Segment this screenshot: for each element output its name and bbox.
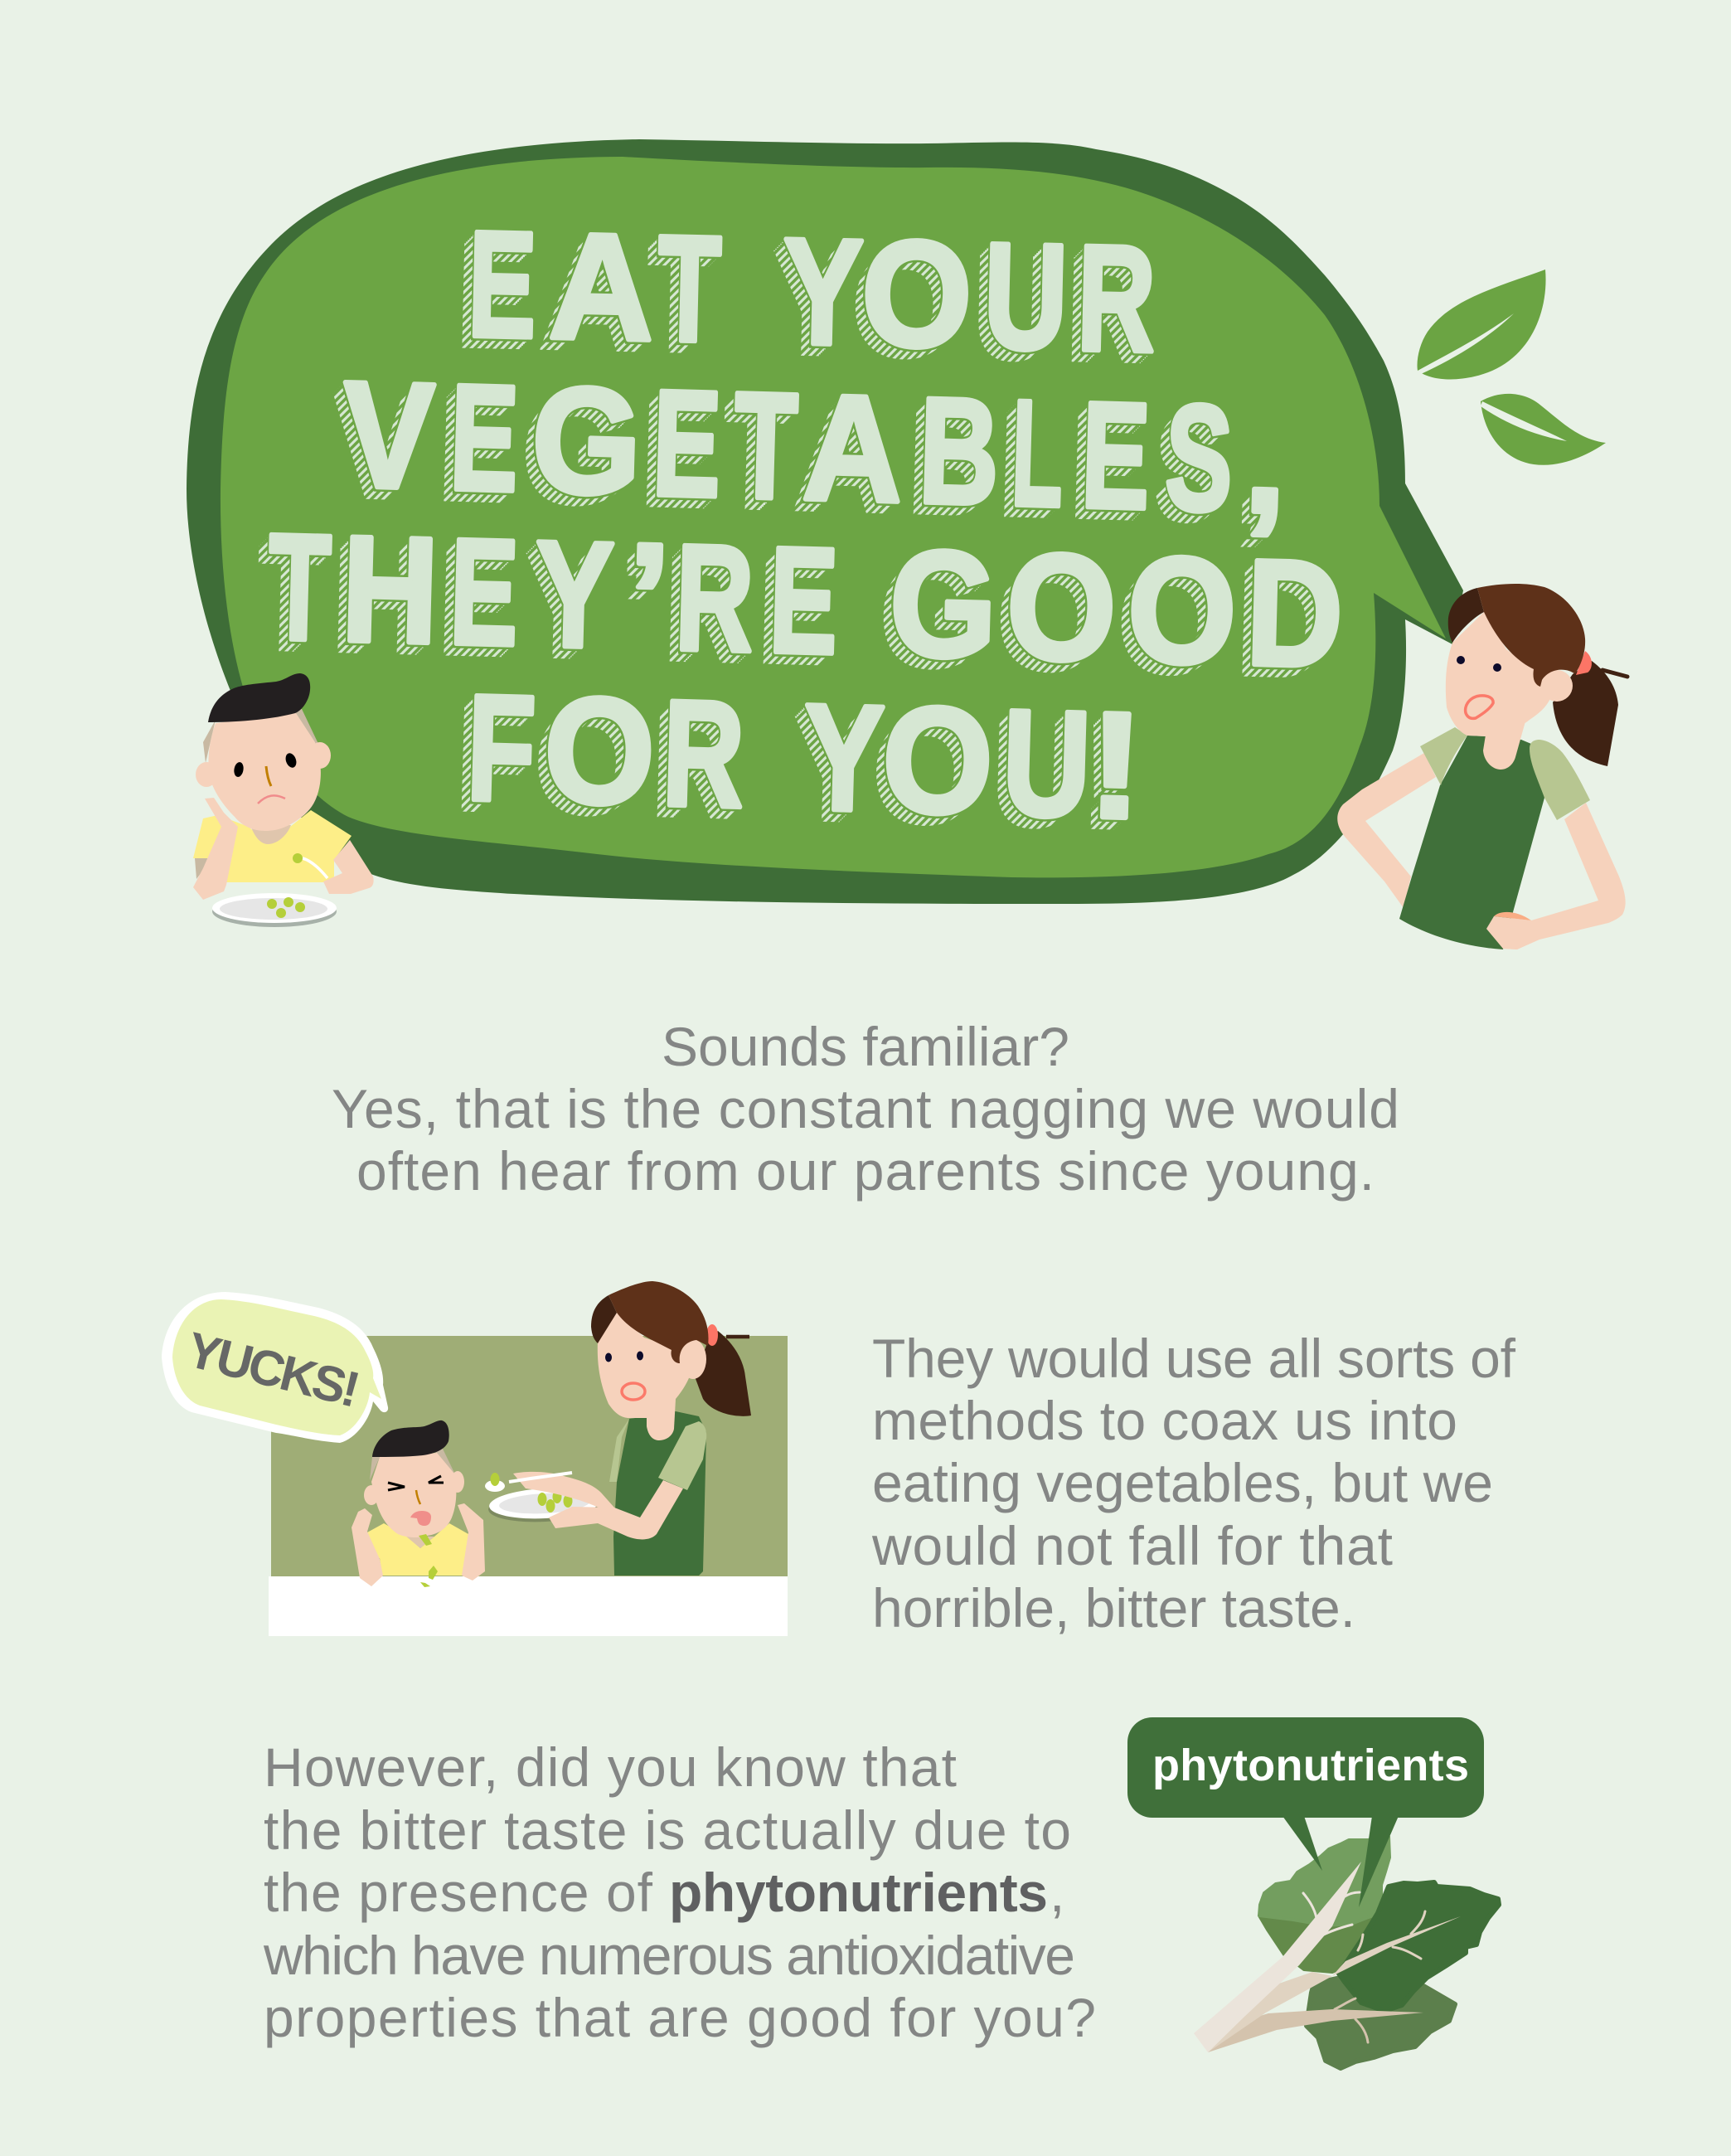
text block: coaxing: methods to coax us into — [872, 1390, 1457, 1451]
title: Eat your vegetables, they're good for you!: E — [1079, 370, 1152, 541]
title: Eat your vegetables, they're good for you!: ! — [1087, 680, 1145, 851]
icon: two leaves — [1418, 270, 1606, 465]
boy hair — [208, 673, 310, 722]
title: Eat your vegetables, they're good for you!: E — [467, 199, 538, 370]
boy head — [364, 1453, 464, 1537]
mother neck and head — [1446, 612, 1573, 770]
mother face details — [1457, 656, 1501, 718]
text block: intro: often hear from our parents since young. — [356, 1140, 1375, 1202]
title: Eat your vegetables, they're good for you!: G — [530, 355, 643, 527]
speech bubble: yucks — [162, 1292, 388, 1443]
boy fork with pea — [293, 853, 327, 878]
title: Eat your vegetables, they're good for you!: ’ — [625, 511, 672, 682]
lower arm and hand — [549, 1421, 706, 1539]
text block: phytonutrients explanation: However, did you know that — [264, 1736, 957, 1798]
title: Eat your vegetables, they're good for you!: U — [982, 211, 1069, 381]
title: Eat your vegetables, they're good for you!: O — [860, 208, 974, 380]
title: Eat your vegetables, they're good for you!: A — [548, 201, 656, 372]
mother sleeves — [1420, 727, 1590, 820]
title: Eat your vegetables, they're good for you!: L — [1010, 368, 1065, 538]
plate with peas — [487, 1486, 602, 1525]
stems and veins — [1194, 1862, 1461, 2052]
mother hair — [591, 1281, 708, 1363]
title: Eat your vegetables, they're good for you!: B — [917, 366, 1001, 537]
text block: phytonutrients explanation: the bitter taste is actually due to — [264, 1799, 1071, 1861]
title: Eat your vegetables, they're good for you!: Y — [781, 206, 865, 377]
plate with peas — [212, 893, 337, 927]
illustration: sulking boy at the table — [193, 673, 374, 927]
mother face details — [605, 1352, 645, 1400]
boy ears — [196, 742, 331, 787]
text block: phytonutrients explanation: properties that are good for you? — [264, 1987, 1096, 2048]
text block: phytonutrients explanation: which have numerous antioxidative — [263, 1925, 1075, 1986]
text block: phytonutrients explanation: the presence of — [264, 1862, 653, 1923]
mother dress — [609, 1411, 706, 1576]
title: Eat your vegetables, they're good for you!: O — [880, 674, 995, 847]
title: Eat your vegetables, they're good for you! — [259, 229, 1340, 830]
title: Eat your vegetables, they're good for you!: E — [448, 352, 521, 523]
boy neck — [250, 825, 291, 844]
boy face details — [233, 751, 298, 804]
callout: phytonutrients — [1127, 1717, 1484, 1907]
illustration: mother scolding — [1337, 584, 1627, 949]
text block: phytonutrients explanation: , — [1050, 1862, 1064, 1923]
boy side hair — [203, 709, 318, 763]
illustration: mealtime scene panel — [162, 1281, 788, 1636]
mother ponytail — [695, 1324, 751, 1416]
title: Eat your vegetables, they're good for you!: Y — [801, 672, 886, 843]
title: Eat your vegetables, they're good for you!: E — [651, 358, 723, 529]
title: Eat your vegetables, they're good for you!: E — [768, 515, 840, 686]
text block: coaxing — [871, 1328, 1516, 1639]
text block: coaxing: would not fall for that — [871, 1515, 1393, 1576]
mother dress — [1399, 736, 1544, 949]
boy shirt — [367, 1523, 468, 1576]
title: Eat your vegetables, they're good for you!: R — [1075, 213, 1157, 384]
boy hair — [372, 1420, 449, 1457]
title: Eat your vegetables, they're good for you!: R — [661, 668, 746, 839]
mother ponytail — [1553, 651, 1627, 766]
title: Eat your vegetables, they're good for you!: S — [1163, 372, 1235, 543]
mother hair — [1448, 584, 1585, 687]
yucks label: YUCKS! — [182, 1322, 366, 1418]
title: Eat your vegetables, they're good for you!: E — [448, 507, 521, 677]
spoon and upper hand — [485, 1472, 614, 1508]
text block: phytonutrients explanation: phytonutrients — [669, 1862, 1048, 1923]
speech bubble: headline — [187, 139, 1463, 904]
mother arms — [1337, 753, 1626, 949]
title: Eat your vegetables, they're good for you!: R — [673, 512, 756, 683]
mother feeding — [485, 1281, 751, 1576]
boy head — [209, 713, 321, 831]
title: Eat your vegetables, they're good for you!: G — [888, 518, 999, 690]
text block: intro: Sounds familiar? — [662, 1016, 1069, 1077]
back leaf — [1307, 1978, 1455, 2068]
title: Eat your vegetables, they're good for you!: O — [1005, 521, 1118, 693]
boy neck — [405, 1536, 434, 1548]
title: Eat your vegetables, they're good for you!: , — [1242, 375, 1289, 545]
title: Eat your vegetables, they're good for you!: T — [656, 203, 723, 374]
boy raised hands — [352, 1503, 485, 1586]
callout label: phytonutrients — [1152, 1741, 1469, 1790]
text block: coaxing: eating vegetables, but we — [872, 1452, 1493, 1513]
text block: coaxing: They would use all sorts of — [872, 1328, 1516, 1389]
boy face details — [388, 1476, 444, 1526]
spit-out food — [419, 1534, 438, 1587]
title: Eat your vegetables, they're good for you!: U — [1001, 677, 1093, 849]
text block: intro — [332, 1016, 1399, 1202]
title: Eat your vegetables, they're good for you!: F — [465, 663, 538, 833]
boy arms — [193, 798, 374, 900]
title: Eat your vegetables, they're good for you!: T — [732, 360, 799, 531]
boy shirt — [193, 810, 352, 882]
title: Eat your vegetables, they're good for you!: O — [1126, 524, 1239, 697]
pale leaf — [1259, 1837, 1389, 1972]
title: Eat your vegetables, they're good for you!: A — [801, 362, 905, 534]
text block: intro: Yes, that is the constant nagging we would — [332, 1078, 1399, 1139]
title: Eat your vegetables, they're good for you!: T — [266, 502, 332, 673]
text block: coaxing: horrible, bitter taste. — [872, 1577, 1355, 1639]
title: Eat your vegetables, they're good for you!: H — [340, 503, 440, 675]
title: Eat your vegetables, they're good for you!: Y — [532, 508, 616, 680]
mother neck and head — [598, 1313, 706, 1440]
boy disgusted — [352, 1420, 485, 1587]
title: Eat your vegetables, they're good for you!: D — [1244, 527, 1345, 699]
title: Eat your vegetables, they're good for you!: V — [341, 349, 436, 521]
title: Eat your vegetables, they're good for you!: O — [542, 665, 657, 837]
dark leaf — [1339, 1882, 1499, 2011]
mother hand — [1486, 912, 1542, 949]
illustration: leafy vegetable — [1127, 1717, 1499, 2068]
text block: phytonutrients explanation — [263, 1736, 1096, 2048]
